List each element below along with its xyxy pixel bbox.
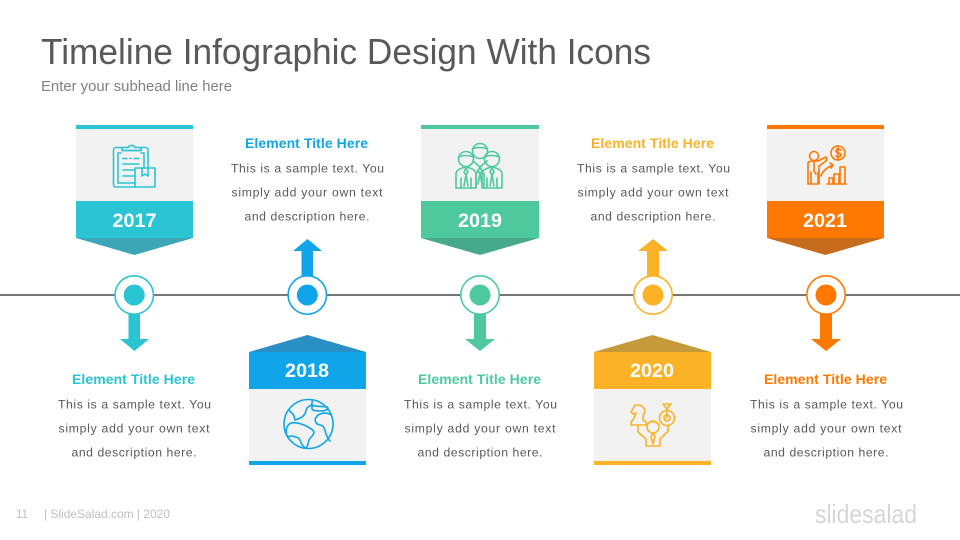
footer: source: | SlideSalad.com | 2020 (44, 507, 170, 521)
marker: 2019 (461, 276, 499, 314)
text block: 2020: Element Title Here (591, 135, 714, 151)
text block: 2019: Element Title Here (418, 371, 541, 387)
icon: globe (284, 400, 333, 448)
marker: 2021 (807, 276, 845, 314)
arrow: 2017 down (120, 312, 149, 351)
text block: 2018: This is a sample text. You (231, 162, 384, 176)
card: 2018 (249, 335, 366, 465)
icon: chess and target (631, 404, 674, 446)
icon: clipboard and box (114, 145, 155, 187)
text block: 2017: simply add your own text (58, 422, 210, 436)
text block: 2020: and description here. (590, 210, 716, 224)
text block: 2018: Element Title Here (245, 135, 368, 151)
text block: 2019: simply add your own text (404, 422, 556, 436)
marker: 2018 (288, 276, 326, 314)
text block: 2020: simply add your own text (578, 186, 729, 200)
text block: 2019: and description here. (418, 446, 542, 460)
text block: 2018: and description here. (244, 210, 370, 224)
card: 2021: 2021 (803, 211, 847, 232)
text block: 2018: simply add your own text (232, 186, 383, 200)
text block: 2017 (58, 371, 211, 460)
subhead: Enter your subhead line here (41, 79, 232, 95)
title: Timeline Infographic Design With Icons (41, 31, 651, 72)
text block: 2018 (231, 135, 384, 224)
card: 2019 (421, 125, 539, 255)
text block: 2021: and description here. (764, 446, 888, 460)
card: 2020 (594, 335, 711, 465)
text block: 2021: Element Title Here (764, 371, 887, 387)
arrow: 2018 up (293, 239, 322, 278)
text block: 2021: This is a sample text. You (750, 398, 903, 412)
marker: 2020 (634, 276, 672, 314)
logo: slidesalad: slidesalad (815, 499, 917, 529)
arrow: 2021 down (811, 312, 841, 351)
text block: 2020 (577, 135, 730, 224)
marker: 2017 (115, 276, 153, 314)
text block: 2021 (750, 371, 903, 460)
card: 2017 (76, 125, 193, 255)
card: 2021 (767, 125, 884, 255)
text block: 2017: and description here. (72, 446, 196, 460)
text block: 2020: This is a sample text. You (577, 162, 730, 176)
footer: page number: 11 (16, 507, 28, 521)
text block: 2019: This is a sample text. You (404, 398, 557, 412)
card: 2020: 2020 (630, 361, 674, 382)
arrow: 2020 up (638, 239, 668, 278)
text block: 2017: This is a sample text. You (58, 398, 211, 412)
card: 2017: 2017 (112, 211, 156, 232)
text block: 2017: Element Title Here (72, 371, 195, 387)
card: 2018: 2018 (285, 361, 329, 382)
timeline line (0, 294, 960, 296)
card: 2019: 2019 (458, 211, 502, 232)
text block: 2019 (404, 371, 557, 460)
icon: business team (456, 144, 502, 188)
icon: presenter and growth (808, 146, 846, 184)
text block: 2021: simply add your own text (750, 422, 902, 436)
arrow: 2019 down (465, 312, 495, 351)
